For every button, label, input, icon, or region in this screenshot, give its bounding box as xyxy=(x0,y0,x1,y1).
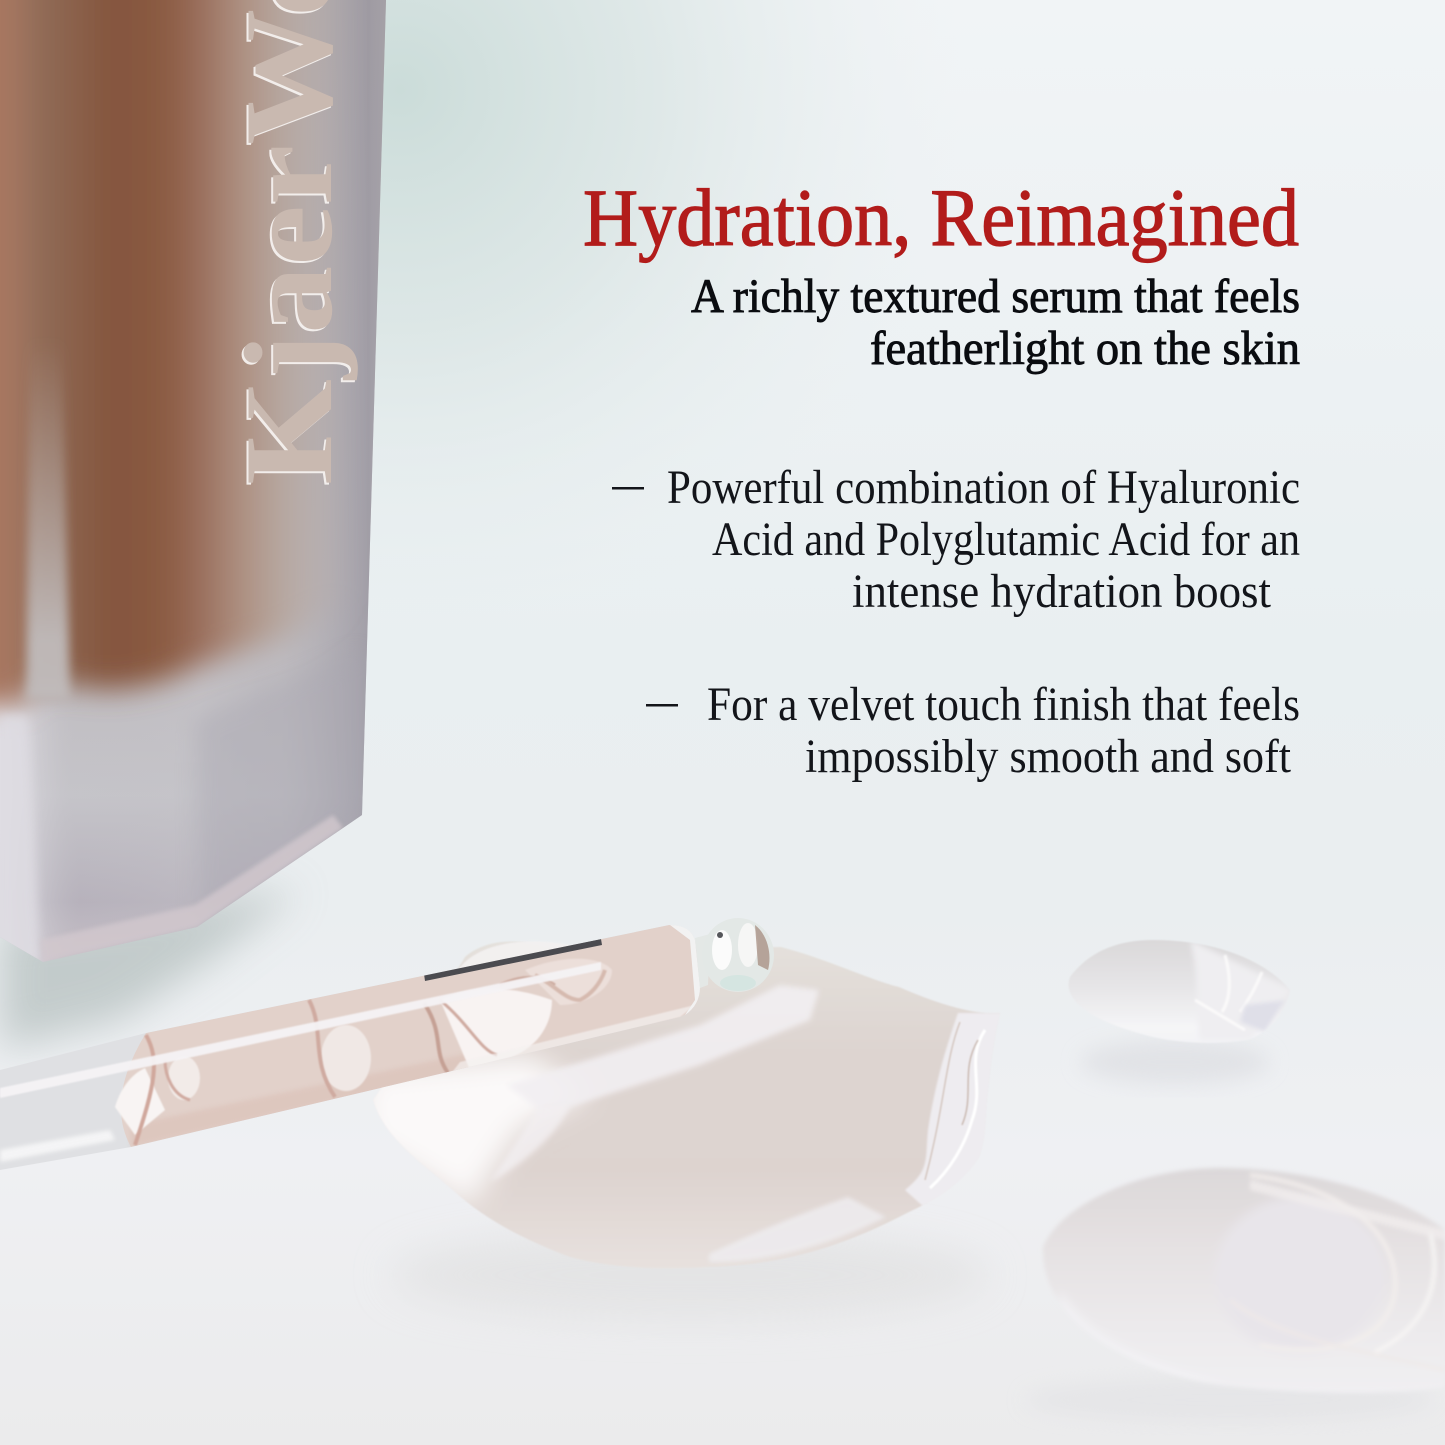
bullet: hyaluronic and polyglutamic acid: intense hydration boost xyxy=(852,565,1272,618)
title: Hydration, Reimagined xyxy=(583,172,1299,263)
bullet: hyaluronic and polyglutamic acid: Powerful combination of Hyaluronic xyxy=(667,461,1300,514)
right rim xyxy=(905,1013,1002,1208)
subtitle: featherlight on the skin xyxy=(870,322,1300,375)
bullet: velvet touch finish: For a velvet touch finish that feels xyxy=(707,678,1300,731)
serum pool xyxy=(375,942,986,1310)
glass pipette xyxy=(0,918,774,1180)
product bottle xyxy=(0,0,400,970)
serum inside pipette xyxy=(121,925,700,1147)
subtitle xyxy=(691,270,1300,375)
bullet: hyaluronic and polyglutamic acid: Acid and Polyglutamic Acid for an xyxy=(712,513,1300,566)
pale facet strip xyxy=(26,340,70,700)
lower facet shading xyxy=(199,692,310,892)
small serum droplet xyxy=(1069,940,1282,1080)
subtitle: A richly textured serum that feels xyxy=(691,270,1300,323)
bullet: velvet touch finish: impossibly smooth and soft xyxy=(805,730,1292,783)
bottom rim wedge xyxy=(709,1197,886,1262)
white glow at left xyxy=(360,1055,590,1205)
pipette tip xyxy=(670,918,774,1015)
bubble behind pipette xyxy=(455,941,590,1000)
pink swirl lines xyxy=(135,970,605,1145)
large serum droplet xyxy=(1044,1167,1444,1326)
bullet: velvet touch finish xyxy=(646,678,1300,783)
dark stripe xyxy=(424,939,602,981)
pale band below pipette xyxy=(507,985,819,1115)
white lens shapes xyxy=(115,959,612,1135)
central rod highlight xyxy=(0,962,601,1098)
serum colour inside bottle xyxy=(0,0,345,705)
wedge reflection xyxy=(496,1110,566,1178)
bullet: hyaluronic and polyglutamic acid xyxy=(612,461,1300,618)
